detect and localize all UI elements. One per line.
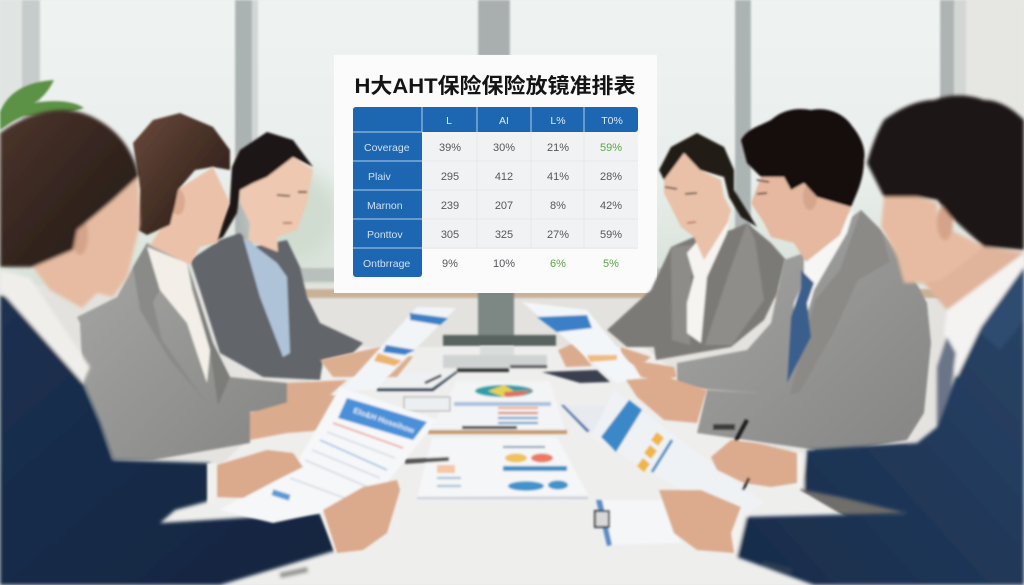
white collar [0,270,90,383]
face and neck [150,167,230,265]
hand: right woman [558,343,592,367]
table values: 239 [441,200,459,212]
person: right man [677,109,931,450]
hair [741,109,864,207]
face and neck [240,157,313,252]
table values: 207 [495,200,513,212]
face and neck [664,153,731,260]
table values: 305 [441,229,459,241]
table row labels: Marnon [367,200,403,212]
ear [171,189,185,215]
tie [937,337,956,427]
face [881,197,984,283]
person: right front man [729,96,1024,585]
monitor stand [443,290,556,346]
table values: 412 [495,171,513,183]
face [751,177,851,262]
held document: right [591,390,797,553]
person: left front woman [0,110,337,585]
clipboard: left [377,371,458,391]
hand [287,380,347,405]
hair [659,133,757,227]
ear [937,204,953,240]
table values: 59% [600,229,622,241]
table row labels: Coverage [364,142,410,154]
pen [405,457,449,464]
table row labels: Plaiv [368,171,392,183]
shirt [147,247,210,383]
shirt [787,210,854,383]
hair [0,110,138,267]
table values: 10% [493,258,515,270]
table values: 30% [493,142,515,154]
table header row: L [446,115,452,127]
table row labels [363,142,410,270]
document: pie chart report [404,381,567,434]
table values: 6% [550,258,566,270]
clipboard: front [595,500,681,546]
table title: H大AHT保险保险放镜准排表 [354,74,636,98]
table values: 5% [603,258,619,270]
suit [190,233,363,380]
table row labels: Ponttov [367,229,403,241]
table values: 21% [547,142,569,154]
table header row [446,115,623,127]
table values: 325 [495,229,513,241]
table body [353,107,638,277]
sleeve buttons [762,561,792,574]
table values: 9% [442,258,458,270]
jacket buttons [713,424,735,430]
table row labels: Ontbrrage [363,258,410,270]
gray lower jacket: right man [800,445,907,520]
cuffs [207,463,217,505]
lapel [977,267,1024,350]
table header row: AI [499,115,509,127]
held document: left [342,307,456,390]
held document: front left: Elo&H Hoseihow [352,406,416,436]
table values: 8% [550,200,566,212]
hands: right man [626,360,707,423]
table values [439,142,622,270]
cuffs [792,450,804,490]
table values: 59% [600,142,622,154]
tablet [542,370,610,383]
neck [924,247,1024,310]
face and neck [33,177,140,308]
table values: 41% [547,171,569,183]
table values: 28% [600,171,622,183]
document: charts report [417,437,588,499]
shirt [243,237,290,357]
hair [213,132,313,242]
hair [867,96,1024,250]
documents on the table [377,370,681,546]
navy suit [0,295,337,585]
hair [133,113,230,235]
facial features [665,187,697,223]
hand: third woman [320,347,413,377]
monitor base [443,346,547,372]
facial features [757,180,769,194]
shirt [687,213,731,343]
monitor panel with comparison table [334,55,657,293]
table values: 295 [441,171,459,183]
table header row: T0% [601,115,623,127]
table values: 42% [600,200,622,212]
table header row: L% [550,115,566,127]
table values: 39% [439,142,461,154]
suit [77,243,287,460]
hands holding document [217,450,303,498]
navy suit [737,267,1024,585]
held document: front left [207,387,437,555]
sleeve buttons [280,567,308,578]
suit [677,210,931,450]
person: right woman [607,133,786,360]
table surface [160,347,851,585]
person: third woman [190,132,363,380]
tie [787,270,814,383]
person: second woman [77,113,347,460]
folder [561,405,612,432]
suit [607,223,786,360]
plant [0,80,84,130]
table values: 27% [547,229,569,241]
ear [72,215,88,255]
facial features [277,192,307,223]
ear [803,184,817,210]
white collar [944,253,1024,377]
hands and pen [727,420,747,457]
held document: center right [522,302,642,383]
